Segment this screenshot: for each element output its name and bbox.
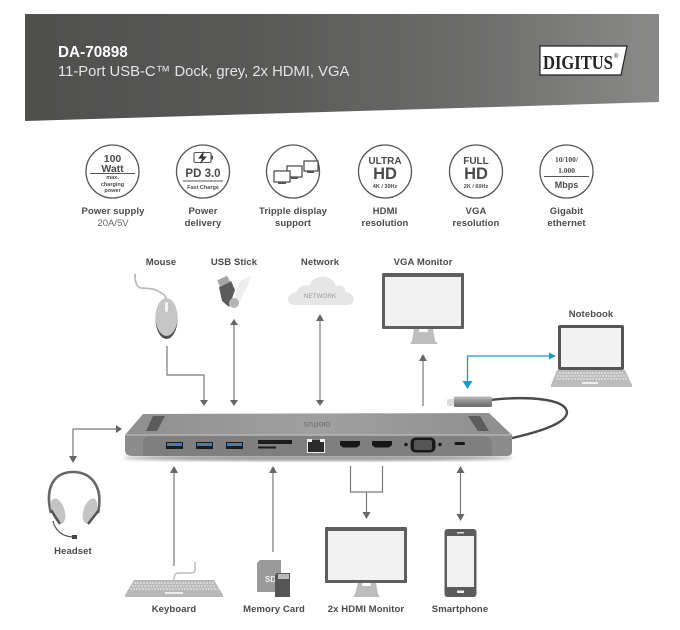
- device: notebook: Notebook: [569, 309, 614, 320]
- device: mouse: Mouse: [146, 257, 176, 268]
- arrow: notebook link (blue): [462, 352, 556, 389]
- USB-C port: [454, 442, 465, 445]
- device: headset: [48, 472, 100, 557]
- USB-C connector: [447, 396, 492, 407]
- feature: VGA resolution: [450, 145, 502, 229]
- feature: power delivery: [176, 145, 230, 229]
- product description: 11-Port USB-C™ Dock, grey, 2x HDMI, VGA: [58, 64, 349, 80]
- HDMI ports: [340, 441, 392, 448]
- device: headset: Headset: [54, 546, 93, 557]
- arrow: memory card: [269, 466, 277, 552]
- USB-A ports: [166, 442, 243, 449]
- device: mouse: [135, 257, 178, 339]
- device: HDMI monitor: [325, 527, 407, 615]
- cable: [490, 398, 567, 439]
- device: memory card: Memory Card: [243, 604, 305, 615]
- arrow: keyboard: [170, 466, 178, 566]
- feature: power supply: charging: [101, 182, 124, 188]
- product code: DA-70898: [58, 44, 128, 61]
- feature: power supply: [82, 145, 145, 229]
- RJ45 port: [307, 439, 325, 453]
- device: memory card: SD: [265, 575, 276, 584]
- feature: gigabit ethernet: Gigabit: [550, 206, 584, 217]
- device: network cloud: [288, 257, 354, 305]
- feature: HDMI resolution: HD: [373, 165, 397, 183]
- feature: HDMI resolution: 4K / 30Hz: [373, 184, 397, 190]
- feature: VGA resolution: resolution: [453, 218, 500, 229]
- docking station: [123, 396, 567, 461]
- feature: triple display: Tripple display: [259, 206, 328, 217]
- feature: HDMI resolution: ULTRA: [368, 156, 402, 167]
- feature: HDMI resolution: HDMI: [373, 206, 397, 217]
- dock top surface: [125, 413, 512, 435]
- feature: HDMI resolution: resolution: [362, 218, 409, 229]
- feature: power supply: Watt: [101, 163, 124, 175]
- device: USB stick: [211, 257, 258, 308]
- feature: power delivery: delivery: [185, 218, 222, 229]
- feature: gigabit ethernet: 1.000: [558, 166, 575, 175]
- feature: power supply: 20A/5V: [97, 218, 129, 229]
- rubber pads: [146, 416, 165, 431]
- VGA port: [404, 438, 442, 452]
- device: HDMI monitor: 2x HDMI Monitor: [328, 604, 404, 615]
- feature: gigabit ethernet: [540, 145, 593, 229]
- device: VGA monitor: [382, 257, 464, 344]
- device: VGA monitor: VGA Monitor: [394, 257, 453, 268]
- feature: gigabit ethernet: ethernet: [547, 218, 586, 229]
- feature: VGA resolution: HD: [464, 165, 488, 183]
- device: memory card: [243, 560, 305, 615]
- feature: power supply: power: [104, 188, 121, 194]
- arrow: network: [316, 314, 324, 406]
- arrow: headset: [69, 425, 122, 463]
- device: keyboard: Keyboard: [152, 604, 196, 615]
- arrow: HDMI monitor split: [350, 466, 382, 519]
- device: keyboard: [125, 562, 223, 615]
- feature: triple display: support: [275, 218, 312, 229]
- Digitus logo: DIGITUS: [543, 52, 613, 74]
- device: network cloud: Network: [301, 257, 340, 268]
- device: smartphone: [432, 529, 488, 615]
- arrow: smartphone: [456, 466, 464, 521]
- card slots: [258, 440, 292, 448]
- arrow: USB stick: [230, 319, 238, 406]
- feature: VGA resolution: VGA: [466, 206, 486, 217]
- feature: gigabit ethernet: 10/100/: [555, 155, 579, 164]
- feature: VGA resolution: FULL: [463, 156, 489, 167]
- feature: gigabit ethernet: Mbps: [555, 180, 578, 190]
- Digitus logo: ®: [614, 53, 619, 60]
- arrow: VGA monitor: [419, 354, 427, 406]
- device: USB stick: USB Stick: [211, 257, 258, 268]
- feature: HDMI resolution: [358, 145, 412, 229]
- feature: power supply: Power supply: [82, 206, 145, 217]
- device: notebook: [551, 309, 632, 387]
- feature: VGA resolution: 2K / 60Hz: [464, 184, 488, 190]
- header banner: [25, 14, 659, 121]
- dock front: [125, 435, 512, 456]
- feature: power supply: max.: [106, 175, 119, 181]
- dock engraved logo: DIGITUS: [303, 420, 330, 427]
- feature: triple display: [259, 145, 328, 229]
- feature: power delivery: Power: [188, 206, 218, 217]
- device: network cloud: NETWORK: [304, 293, 337, 300]
- arrow: mouse to dock: [167, 346, 208, 406]
- feature: power supply: 100: [104, 153, 121, 165]
- feature: power delivery: PD 3.0: [185, 168, 221, 180]
- feature: power delivery: Fast Charge: [187, 185, 219, 191]
- device: smartphone: Smartphone: [432, 604, 488, 615]
